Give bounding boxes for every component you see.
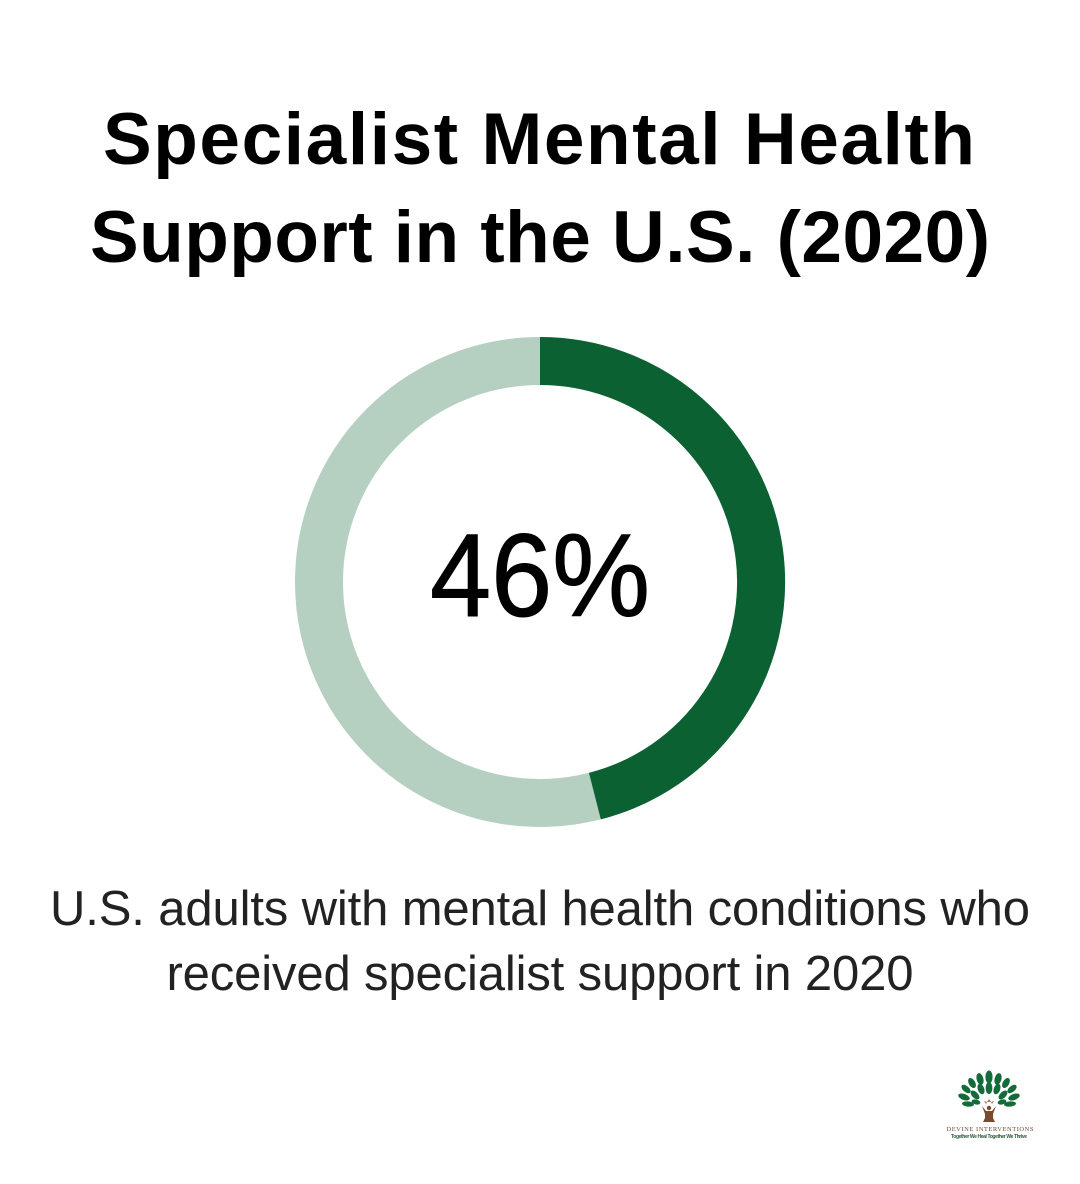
caption: received specialist support in 2020: [166, 947, 914, 1001]
title: [90, 99, 990, 278]
icon: trunk figure: [982, 1099, 996, 1122]
caption: U.S. adults with mental health conditions who: [50, 882, 1030, 936]
title: Support in the U.S. (2020): [90, 197, 990, 278]
logo name: DEVINE INTERVENTIONS: [946, 1126, 1034, 1133]
donut chart: 46%: [319, 361, 761, 803]
caption: [50, 882, 1030, 1001]
logo tagline: Together We Heal Together We Thrive: [951, 1134, 1027, 1140]
logo: Devine Interventions: [946, 1070, 1034, 1140]
title: Specialist Mental Health: [103, 99, 975, 180]
center value: 46%: [430, 510, 650, 642]
icon: tree: [957, 1070, 1021, 1107]
